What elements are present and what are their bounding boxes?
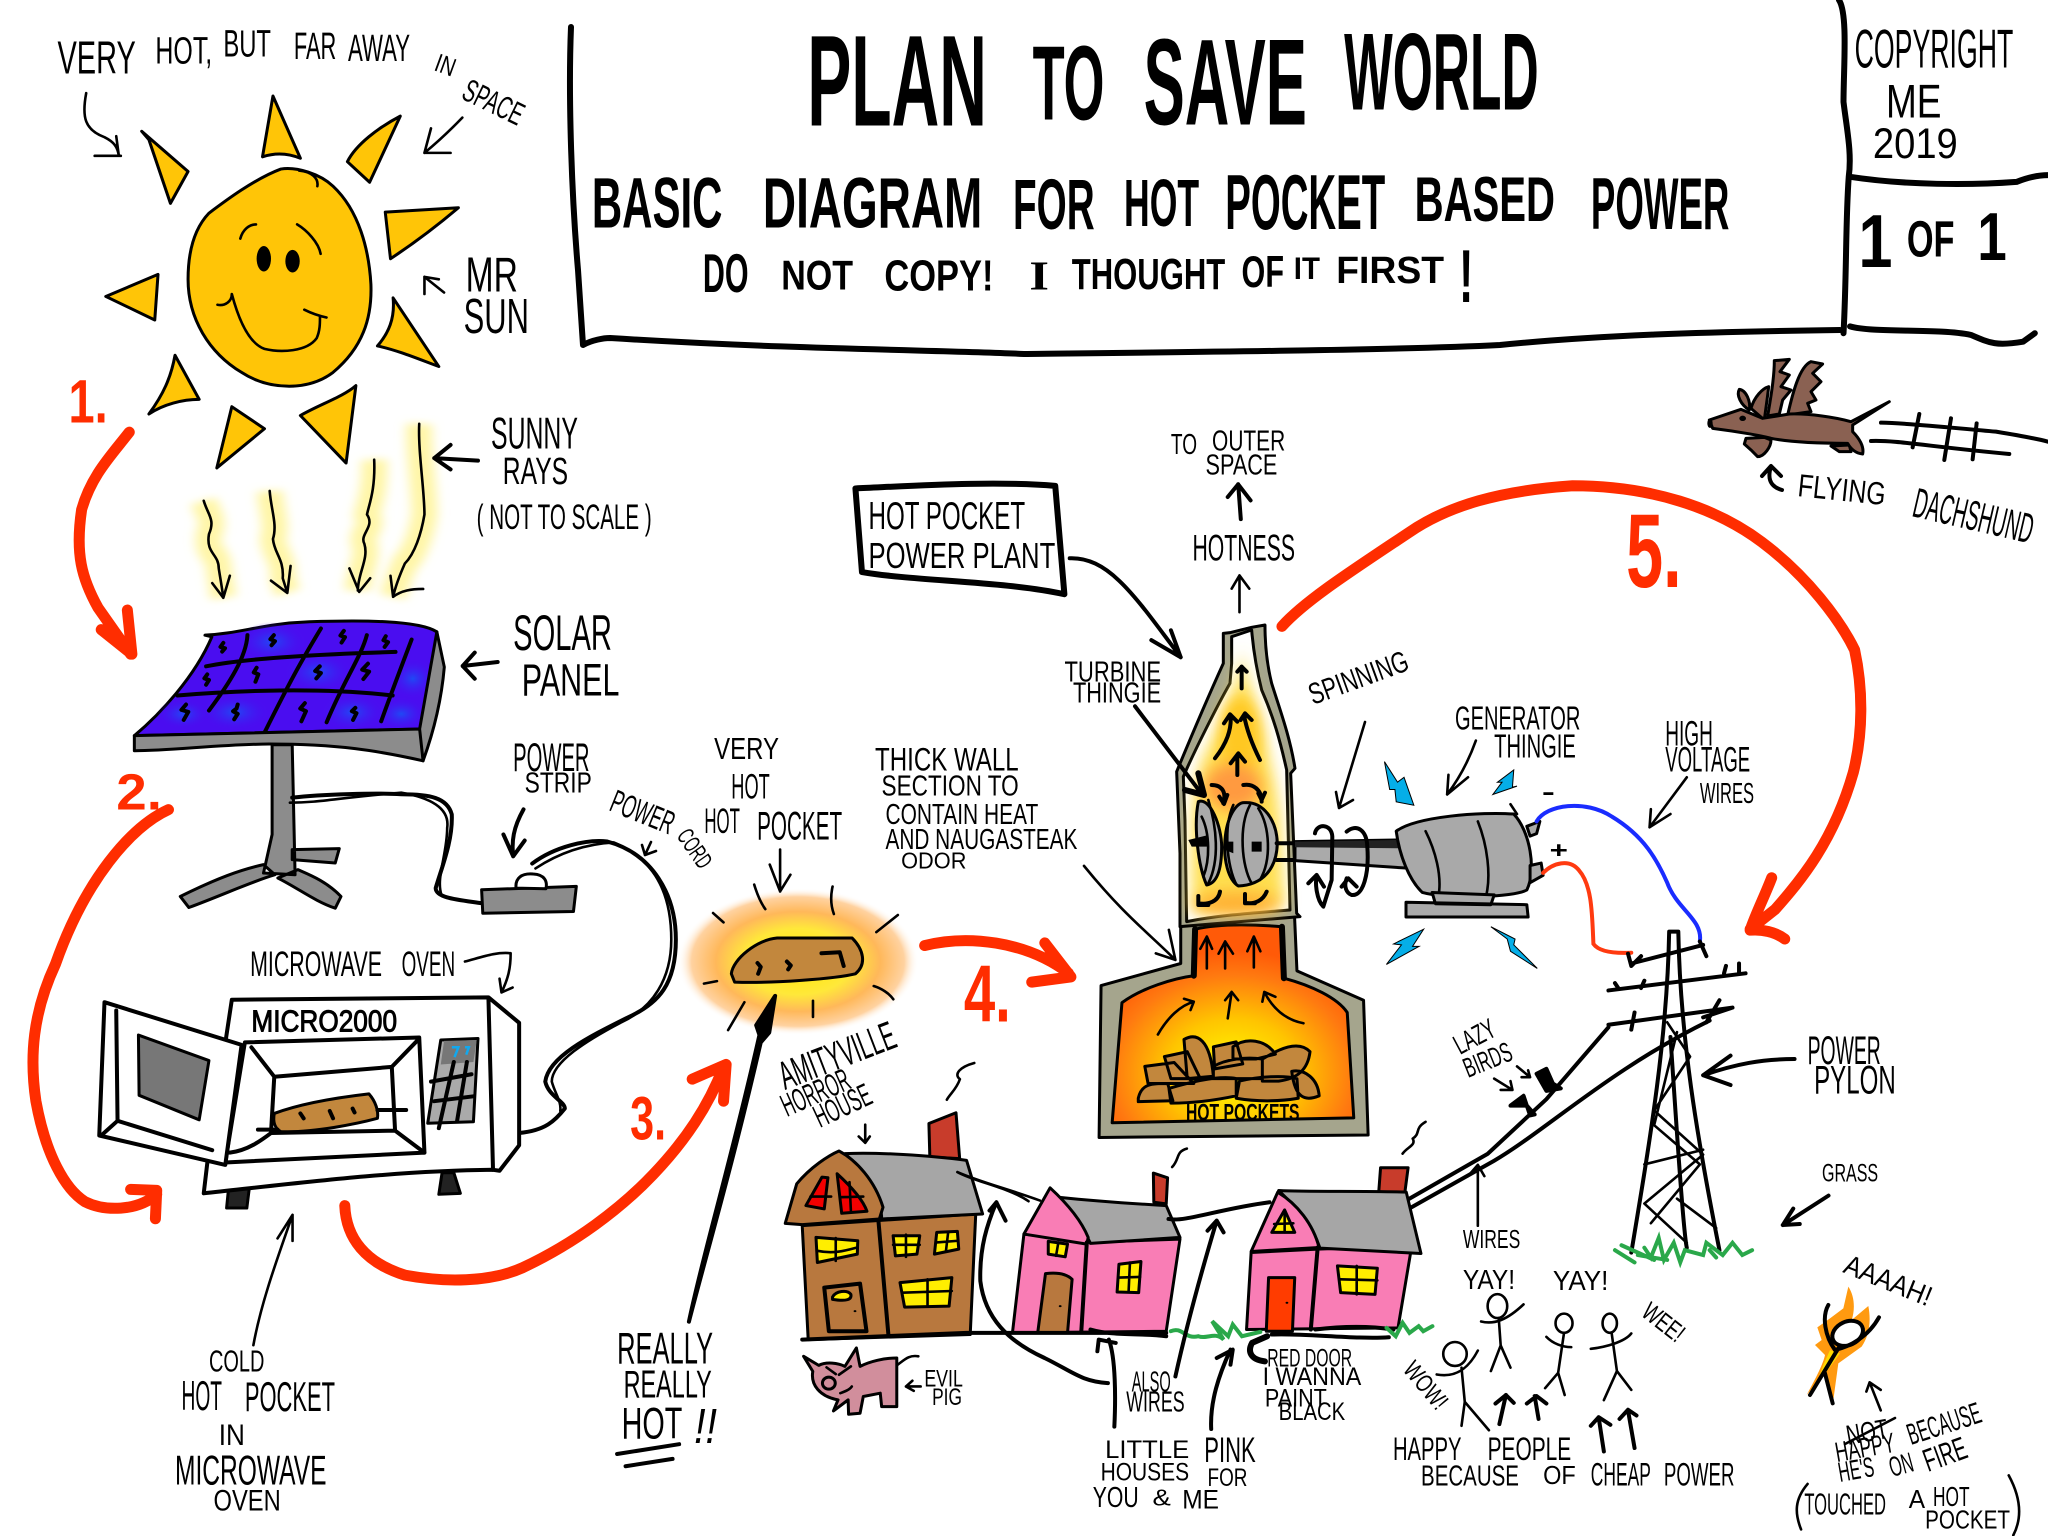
step 3 arrow <box>345 1064 726 1280</box>
warning line: THOUGHT <box>1072 250 1225 298</box>
copyright block: ME <box>1886 75 1941 128</box>
label: evil pig <box>906 1366 963 1411</box>
body <box>1396 813 1531 897</box>
label: happy people <box>1393 1395 1734 1493</box>
generator <box>1384 762 1700 968</box>
text: MICROWAVE <box>175 1448 327 1494</box>
heat arrows <box>1198 667 1267 905</box>
page number <box>1859 199 2007 283</box>
subtitle <box>592 159 1729 246</box>
feet <box>227 1173 460 1208</box>
base <box>1406 892 1528 917</box>
lines to pylon <box>1404 1021 1710 1210</box>
label: thick wall section: THICK WALL <box>875 741 1019 778</box>
panel cable <box>292 794 482 903</box>
subtitle: BASED <box>1415 164 1555 234</box>
label: little pink houses: ME <box>1182 1485 1219 1515</box>
label: thick wall section: ODOR <box>901 847 966 873</box>
interior <box>1183 630 1290 922</box>
warning line: NOT <box>781 252 853 298</box>
label: red door <box>1250 1336 1362 1426</box>
generator: - <box>1542 778 1555 804</box>
label: little pink houses: YOU <box>1093 1482 1139 1514</box>
label: mr sun: MR <box>466 248 518 303</box>
sun label: HOT, <box>155 29 212 72</box>
label: not happy: BECAUSE <box>1903 1397 1985 1452</box>
label: sunny rays <box>434 409 652 537</box>
evil pig <box>804 1348 918 1414</box>
title frame <box>570 0 2048 354</box>
label: not happy <box>1797 1382 2019 1535</box>
label: also wires: WIRES <box>1126 1387 1185 1418</box>
label: very hot pocket <box>704 732 842 891</box>
sun label <box>57 22 530 156</box>
step 2 arrow: 2. <box>116 763 162 821</box>
label: sunny rays: RAYS <box>503 449 568 493</box>
high voltage wires <box>1537 806 1700 941</box>
label: lazy birds and birds: BIRDS <box>1459 1036 1517 1084</box>
body <box>204 997 519 1193</box>
ears <box>1738 387 1769 420</box>
title: SAVE <box>1144 14 1307 151</box>
label: red door: I WANNA <box>1263 1363 1362 1391</box>
sun label: FAR <box>294 24 336 67</box>
fire <box>1112 925 1354 1123</box>
stand <box>180 745 341 908</box>
happy people: WEE! <box>1636 1296 1691 1348</box>
label: microwave oven: OVEN <box>402 944 455 984</box>
warning line <box>703 234 1473 318</box>
sun label: IN <box>431 47 460 82</box>
warning line: DO <box>703 243 749 304</box>
spin arrows <box>1308 826 1368 907</box>
little pink house <box>1012 1173 1180 1333</box>
label: high voltage wires <box>1650 713 1754 827</box>
label: amityville horror house: AMITYVILLE <box>772 1014 902 1098</box>
text: GENERATOR <box>1455 700 1580 737</box>
label: also wires <box>980 1202 1224 1418</box>
label: solar panel <box>463 605 619 705</box>
text: ( NOT TO SCALE ) <box>477 497 652 537</box>
label: lazy birds and birds <box>1448 1013 1561 1115</box>
label: hotness <box>1192 528 1295 612</box>
label: red door: RED DOOR <box>1267 1345 1352 1372</box>
happy people: YAY! <box>1463 1264 1515 1295</box>
label: happy people: PEOPLE <box>1488 1431 1571 1467</box>
label: not happy: A <box>1909 1486 1925 1514</box>
step 4 arrow <box>925 941 1071 1039</box>
label: evil pig: PIG <box>932 1384 962 1411</box>
label: red door: BLACK <box>1279 1398 1345 1426</box>
label: cold hot pocket <box>175 1215 335 1517</box>
label: amityville horror house: HOUSE <box>808 1076 877 1134</box>
furnace chamber <box>1099 912 1368 1137</box>
panel edge <box>134 729 423 761</box>
label: to outer space: OUTER <box>1212 426 1285 457</box>
label: evil pig: EVIL <box>924 1366 963 1392</box>
flow arrows <box>1158 937 1303 1035</box>
text: THINGIE <box>1494 728 1576 765</box>
power pylon <box>1608 932 1752 1262</box>
label: happy people: OF <box>1543 1462 1576 1490</box>
motion lines <box>1871 414 2048 460</box>
label: turbine thingie <box>1064 657 1200 792</box>
warning line: I <box>1029 253 1049 299</box>
legs <box>1744 437 1851 457</box>
label: turbine thingie: TURBINE <box>1064 657 1161 689</box>
label: really really hot: HOT <box>622 1399 682 1449</box>
label: high voltage wires: HIGH <box>1665 713 1713 753</box>
text: HOTNESS <box>1192 528 1295 569</box>
label: happy people: BECAUSE <box>1421 1460 1519 1492</box>
warning line: COPY! <box>884 252 993 300</box>
glow <box>677 888 919 1035</box>
text: SOLAR <box>513 605 612 661</box>
label: really really hot <box>617 996 775 1466</box>
solar panel <box>134 621 576 913</box>
very hot pocket <box>677 885 919 1035</box>
label: microwave oven: MICROWAVE <box>250 944 382 984</box>
text: POWER <box>513 734 590 779</box>
furnace chamber: HOT POCKETS <box>1186 1099 1300 1126</box>
page number: OF <box>1907 210 1955 268</box>
text: PANEL <box>522 656 619 705</box>
label: generator thingie <box>1447 700 1580 794</box>
text: POWER <box>1664 1457 1734 1493</box>
sun label: VERY <box>57 33 136 84</box>
cavity <box>225 1038 424 1162</box>
label: happy people: HAPPY <box>1393 1431 1462 1467</box>
text: PINK <box>1204 1430 1256 1469</box>
label: thick wall section <box>875 741 1175 960</box>
label: turbine thingie: THINGIE <box>1073 678 1161 709</box>
horror house <box>785 1113 1040 1340</box>
sun <box>106 96 458 468</box>
brand: MICRO2000 <box>251 1004 397 1038</box>
warning line: IT <box>1294 251 1320 286</box>
pocket <box>731 938 863 982</box>
power strip <box>482 886 576 913</box>
label: to outer space: SPACE <box>1206 450 1277 481</box>
label: very hot pocket: VERY <box>714 732 779 766</box>
label: spinning <box>1304 645 1413 808</box>
text: POCKET <box>245 1374 335 1420</box>
label: cold hot pocket: COLD <box>209 1345 264 1378</box>
microwave oven <box>99 997 519 1208</box>
page number: 1 <box>1859 200 1892 283</box>
label: really really hot: REALLY <box>617 1324 713 1374</box>
label: hot pocket power plant: HOT POCKET <box>868 495 1025 538</box>
label: not happy: HAPPY <box>1833 1427 1897 1468</box>
grass <box>1615 1238 1752 1262</box>
panel face <box>134 621 440 736</box>
step 1 arrow <box>69 368 132 654</box>
label: little pink houses: LITTLE <box>1105 1436 1189 1464</box>
label: spinning: SPINNING <box>1304 645 1413 712</box>
sun label: AWAY <box>348 26 410 70</box>
label: amityville horror house: HORROR <box>775 1061 856 1123</box>
terminals: + <box>1550 837 1568 863</box>
power cord <box>519 841 676 1133</box>
text: ! <box>1459 234 1473 318</box>
warning line: OF <box>1242 247 1284 297</box>
label: not happy: ON <box>1886 1447 1917 1483</box>
step 5 arrow: 5. <box>1626 493 1682 610</box>
copyright block <box>1855 18 2013 167</box>
pink house with red door <box>1247 1168 1421 1331</box>
label: not happy: NOT <box>1844 1413 1890 1451</box>
label: thick wall section: SECTION TO <box>882 770 1019 802</box>
wings <box>1768 359 1823 416</box>
label: also wires: ALSO <box>1132 1366 1171 1398</box>
lightning <box>1384 762 1537 968</box>
man on fire <box>1807 1249 1937 1403</box>
turbine <box>1196 801 1277 886</box>
text: 1 <box>1977 199 2007 275</box>
title: PLAN <box>807 8 987 153</box>
text: SUN <box>464 290 529 344</box>
step 5 arrow <box>1282 486 1861 939</box>
happy people: YAY! <box>1553 1265 1608 1296</box>
pile of hot pockets <box>1138 1037 1319 1103</box>
label: sunny rays: SUNNY <box>491 409 578 459</box>
keypad <box>428 1038 478 1123</box>
step 4 arrow: 4. <box>964 949 1011 1039</box>
label: to outer space: TO <box>1171 429 1197 461</box>
label: hot pocket power plant: POWER PLANT <box>868 535 1055 576</box>
body <box>1709 402 1889 454</box>
label: to outer space <box>1171 426 1285 519</box>
hot pocket inside <box>274 1094 378 1132</box>
text: WIRES <box>1463 1226 1520 1254</box>
chimney walls <box>1177 625 1300 927</box>
label: very hot pocket: HOT <box>731 767 770 806</box>
label: amityville horror house <box>772 1014 974 1143</box>
step 2 arrow <box>33 763 168 1219</box>
label: power pylon <box>1703 1028 1896 1103</box>
label: red door: PAINT <box>1265 1385 1327 1412</box>
label: hot pocket power plant <box>855 484 1064 594</box>
door <box>99 1002 242 1165</box>
flying dachshund <box>1707 359 2048 460</box>
text: PYLON <box>1814 1058 1896 1103</box>
sun label: BUT <box>223 22 271 65</box>
label: cold hot pocket: HOT <box>182 1373 222 1419</box>
subtitle: POCKET <box>1225 159 1385 246</box>
subtitle: DIAGRAM <box>763 163 982 243</box>
label: not happy: HOT <box>1933 1481 1970 1512</box>
label: thick wall section: AND NAUGASTEAK <box>885 824 1077 856</box>
label: power cord: POWER <box>605 783 680 842</box>
label: little pink houses: HOUSES <box>1101 1459 1189 1486</box>
label: little pink houses: & <box>1152 1485 1171 1510</box>
label: cold hot pocket: IN <box>219 1420 245 1452</box>
text: POCKET <box>757 803 842 848</box>
man on fire: AAAAH! <box>1840 1249 1937 1312</box>
label: not happy: FIRE <box>1918 1430 1972 1479</box>
subtitle: FOR <box>1013 164 1095 244</box>
chimney with turbine <box>1177 625 1410 927</box>
label: flying dachshund <box>1762 466 2038 552</box>
label: power strip <box>503 734 592 856</box>
shaft <box>1295 840 1410 868</box>
step 1 arrow: 1. <box>69 368 108 436</box>
sunny rays <box>204 424 424 598</box>
subtitle: BASIC <box>592 163 722 243</box>
text: STRIP <box>525 768 592 799</box>
label: power cord: CORD <box>672 823 718 873</box>
label: flying dachshund: FLYING <box>1796 467 1888 512</box>
ground, wires and grass by the houses <box>802 1122 1432 1340</box>
step 3 arrow: 3. <box>630 1085 666 1153</box>
label: very hot pocket: HOT <box>704 801 740 841</box>
label: really really hot: !! <box>694 1400 717 1454</box>
label: lazy birds and birds: LAZY <box>1448 1013 1501 1060</box>
walls <box>1099 912 1368 1137</box>
title: TO <box>1033 24 1104 143</box>
warning line: FIRST <box>1336 248 1444 291</box>
text: GRASS <box>1822 1159 1878 1187</box>
label: mr sun <box>424 248 529 344</box>
label: grass <box>1783 1159 1878 1225</box>
label: wires <box>1463 1165 1520 1254</box>
label: little pink houses <box>1093 1340 1256 1515</box>
label: not happy: HE'S <box>1836 1451 1876 1488</box>
text: VOLTAGE <box>1665 739 1750 779</box>
label: really really hot: REALLY <box>624 1362 712 1406</box>
sun label: SPACE <box>457 72 530 132</box>
arrow to plant <box>1070 558 1181 657</box>
heat <box>1192 650 1284 913</box>
label: little pink houses: FOR <box>1208 1464 1247 1492</box>
happy people: WOW! <box>1397 1356 1454 1415</box>
label: thick wall section: CONTAIN HEAT <box>885 799 1038 831</box>
label: cold hot pocket: OVEN <box>214 1485 281 1517</box>
text: POWER <box>1808 1028 1881 1073</box>
label: happy people: CHEAP <box>1591 1457 1651 1493</box>
subtitle: HOT <box>1124 166 1199 240</box>
text: WIRES <box>1700 778 1754 810</box>
happy people <box>1397 1264 1691 1430</box>
